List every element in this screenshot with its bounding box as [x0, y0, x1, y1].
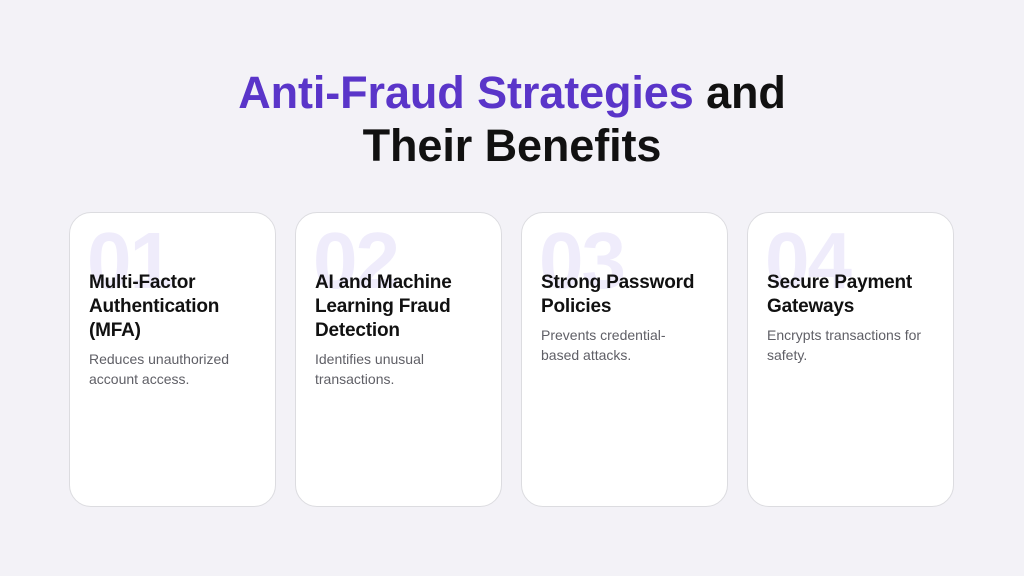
panel: card 4: Secure Payment Gateways: [767, 272, 912, 317]
panel: card 3: [521, 212, 728, 507]
panel: card 4: Encrypts transactions for safety.: [767, 327, 921, 363]
title: Their Benefits: [363, 120, 661, 171]
panel: card 2: 02: [313, 216, 398, 305]
panel: card 2: [295, 212, 502, 507]
panel: card 1: Reduces unauthorized account access.: [89, 351, 229, 387]
title: [238, 67, 786, 171]
panel: card 2: Identifies unusual transactions.: [315, 351, 424, 387]
panel: card 1: [69, 212, 276, 507]
panel: card 1: 01: [87, 216, 172, 305]
panel: card 4: 04: [765, 216, 850, 305]
panel: card 3: Prevents credential-based attacks.: [541, 327, 666, 363]
panel: card 3: 03: [539, 216, 624, 305]
panel: card 3: Strong Password Policies: [541, 272, 694, 317]
title: Anti-Fraud Strategies and: [238, 67, 786, 118]
panel: card 1: Multi-Factor Authentication (MFA): [89, 272, 219, 341]
panel: card 4: [747, 212, 954, 507]
panel: card 2: AI and Machine Learning Fraud Detection: [315, 272, 452, 341]
